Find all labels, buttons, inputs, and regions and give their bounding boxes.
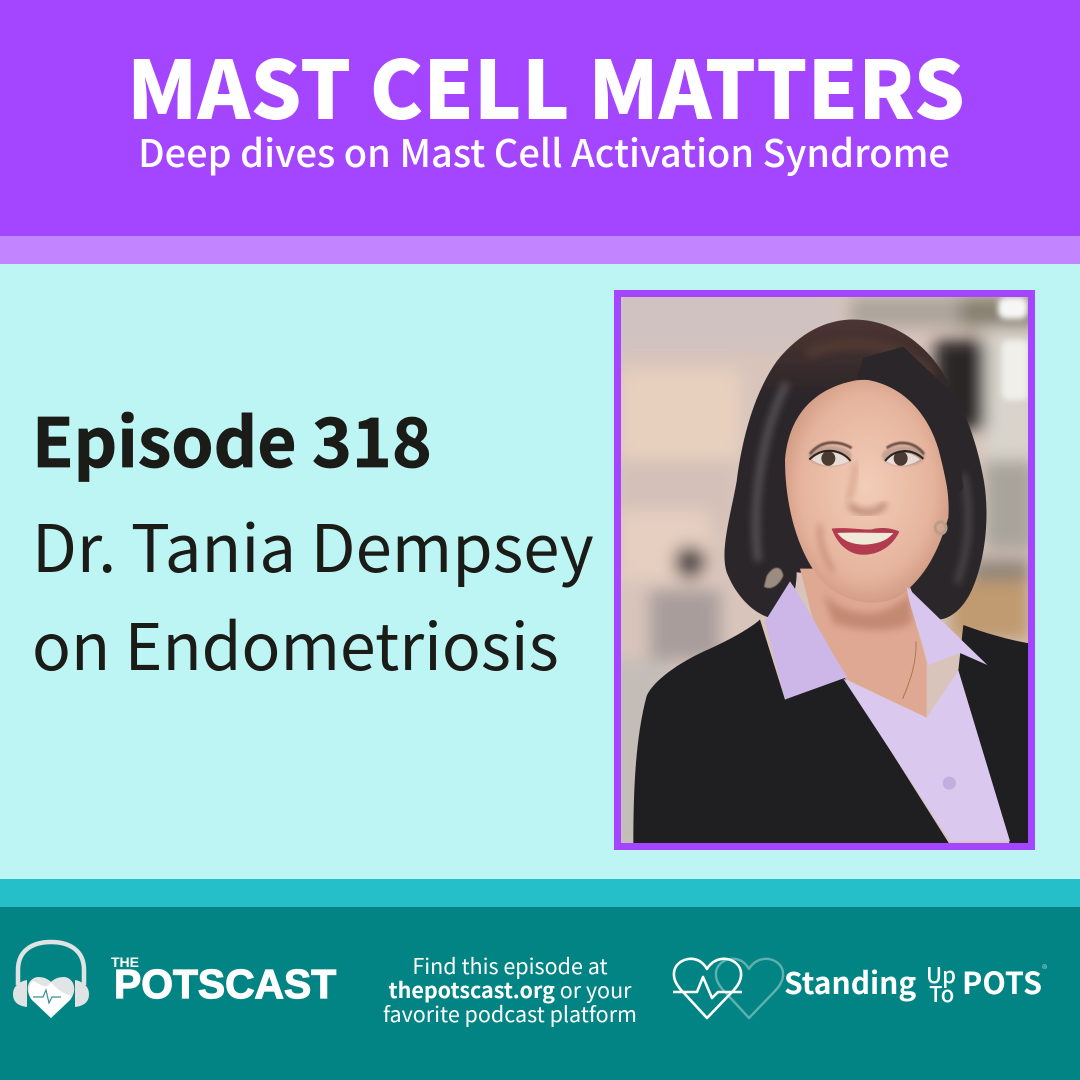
guest portrait photo xyxy=(610,290,1040,850)
wordmark: The Potscast: THE xyxy=(111,954,139,970)
photo frame xyxy=(614,290,1035,850)
episode topic: on Endometriosis xyxy=(32,595,559,689)
icon: overlapping hearts with pulse xyxy=(673,959,783,1018)
icon: headphones with heart xyxy=(13,942,89,1018)
shirt xyxy=(843,670,1010,841)
main panel background xyxy=(0,264,1080,879)
earring xyxy=(935,522,946,534)
footer accent stripe xyxy=(0,879,1080,907)
hair over right of forehead xyxy=(857,347,963,503)
left smile line xyxy=(820,525,833,570)
hair xyxy=(724,320,987,620)
wordmark: Standing Up To POTS: To xyxy=(929,977,954,1009)
left eye xyxy=(809,451,851,466)
logo: The Potscast xyxy=(13,942,336,1018)
wordmark: The Potscast: POTSCAST xyxy=(114,961,336,1007)
title: MAST CELL MATTERS xyxy=(127,27,965,143)
header band xyxy=(0,0,1080,236)
header accent stripe xyxy=(0,236,1080,264)
call to action text xyxy=(383,950,637,1029)
episode number: Episode 318 xyxy=(32,389,432,487)
nose xyxy=(849,504,886,512)
teeth xyxy=(837,533,893,545)
call to action text: thepotscast.org or your xyxy=(389,974,632,1005)
right eye xyxy=(885,451,923,466)
hair highlights xyxy=(756,383,787,561)
neck xyxy=(800,569,927,718)
right collar xyxy=(907,587,987,665)
wordmark: Standing Up To POTS: Standing xyxy=(784,959,916,1003)
right eyeshadow xyxy=(882,446,925,466)
necklace xyxy=(903,641,916,699)
call to action text: favorite podcast platform xyxy=(383,998,637,1029)
left eyeshadow xyxy=(808,446,852,466)
footer band xyxy=(0,907,1080,1080)
shirt button xyxy=(943,777,956,790)
jacket xyxy=(633,620,1028,845)
left collar xyxy=(765,581,847,700)
wordmark: Standing Up To POTS: ® xyxy=(1042,961,1047,977)
call to action text: Find this episode at xyxy=(412,950,608,981)
wordmark: Standing Up To POTS: POTS xyxy=(962,959,1042,1003)
wordmark: Standing Up To POTS: Up xyxy=(926,958,956,990)
face xyxy=(785,380,949,603)
right eyebrow xyxy=(887,443,924,454)
wordmark: Standing Up To POTS xyxy=(784,958,1047,1009)
logo: Standing Up To POTS xyxy=(673,958,1047,1018)
blurred background xyxy=(610,290,1040,850)
guest name: Dr. Tania Dempsey xyxy=(32,496,594,591)
lips xyxy=(832,528,899,555)
left eyebrow xyxy=(810,443,852,454)
subtitle: Deep dives on Mast Cell Activation Syndrome xyxy=(138,123,950,178)
